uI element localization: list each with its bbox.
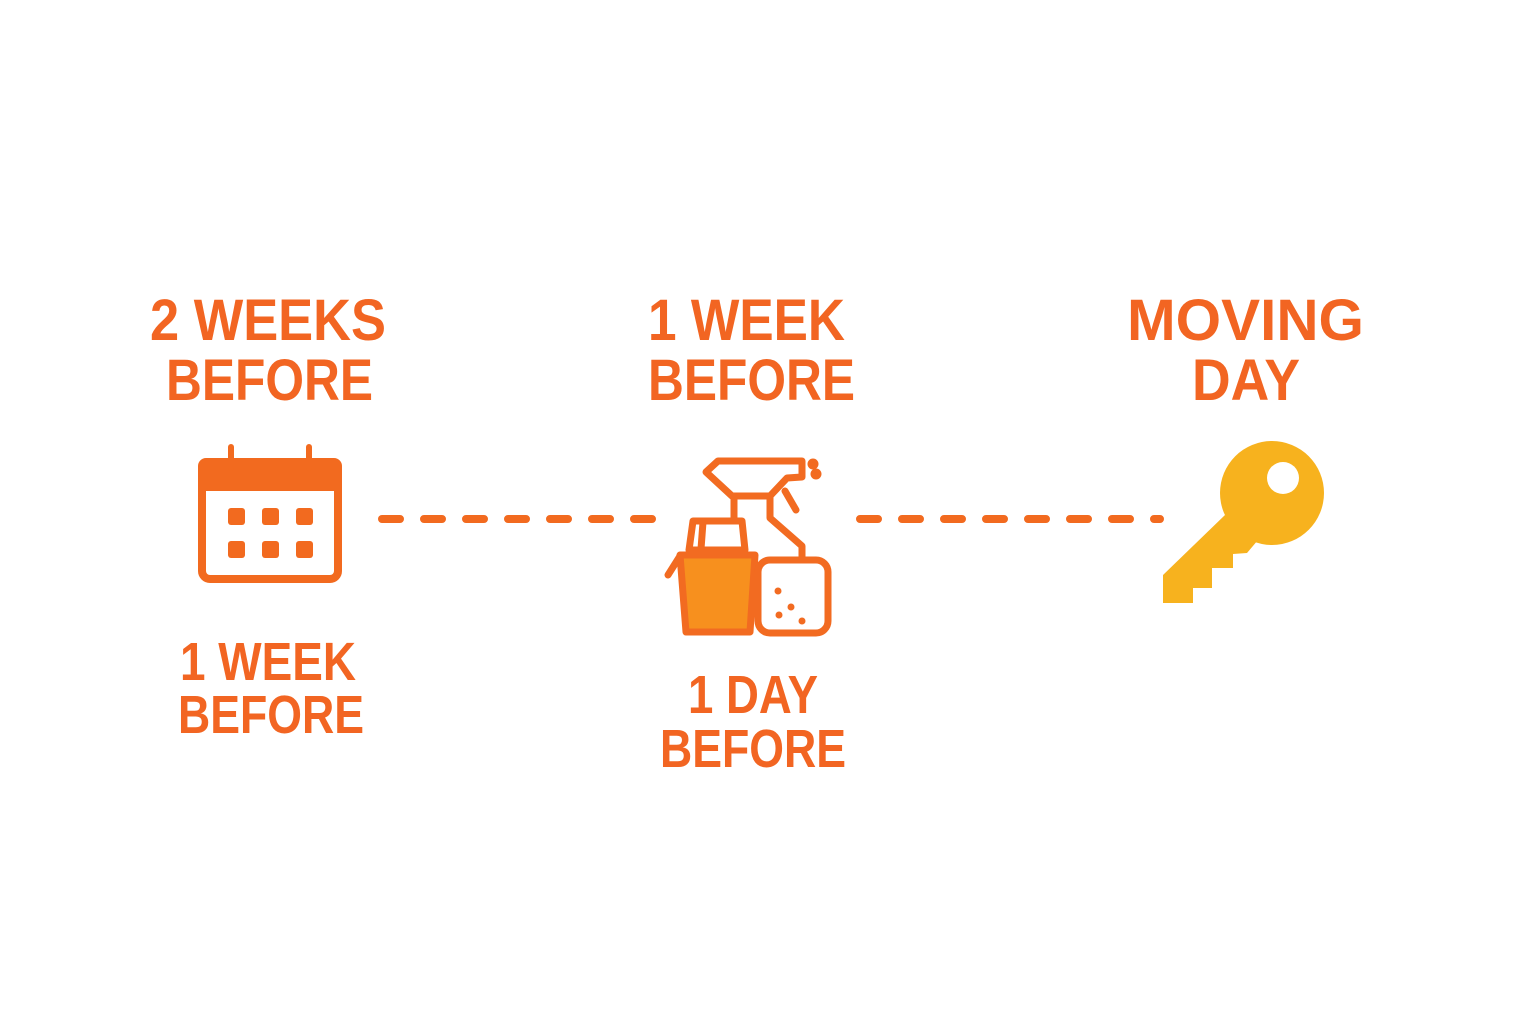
heading: 2 weeks before: 2 WEEKS bbox=[150, 288, 386, 353]
label: 1 day before: 1 DAY bbox=[688, 665, 818, 725]
heading: 2 weeks before: BEFORE bbox=[166, 348, 373, 413]
heading: moving day: MOVING bbox=[1127, 288, 1364, 353]
label: 1 week before bbox=[178, 632, 364, 745]
label: 1 day before bbox=[660, 665, 846, 779]
label: 1 week before: 1 WEEK bbox=[180, 632, 356, 692]
icon: calendar bbox=[198, 447, 342, 579]
icon: cleaning supplies bbox=[668, 461, 828, 633]
heading: 1 week before bbox=[648, 288, 855, 413]
heading: 1 week before: 1 WEEK bbox=[648, 288, 845, 353]
heading: 1 week before: BEFORE bbox=[648, 348, 855, 413]
heading: 2 weeks before bbox=[150, 288, 386, 413]
heading: moving day: DAY bbox=[1192, 348, 1300, 413]
dashed connector left bbox=[382, 515, 652, 523]
label: 1 day before: BEFORE bbox=[660, 719, 846, 779]
dashed connector right bbox=[860, 515, 1160, 523]
heading: moving day bbox=[1127, 288, 1364, 413]
label: 1 week before: BEFORE bbox=[178, 685, 364, 745]
icon: key bbox=[1163, 441, 1324, 603]
